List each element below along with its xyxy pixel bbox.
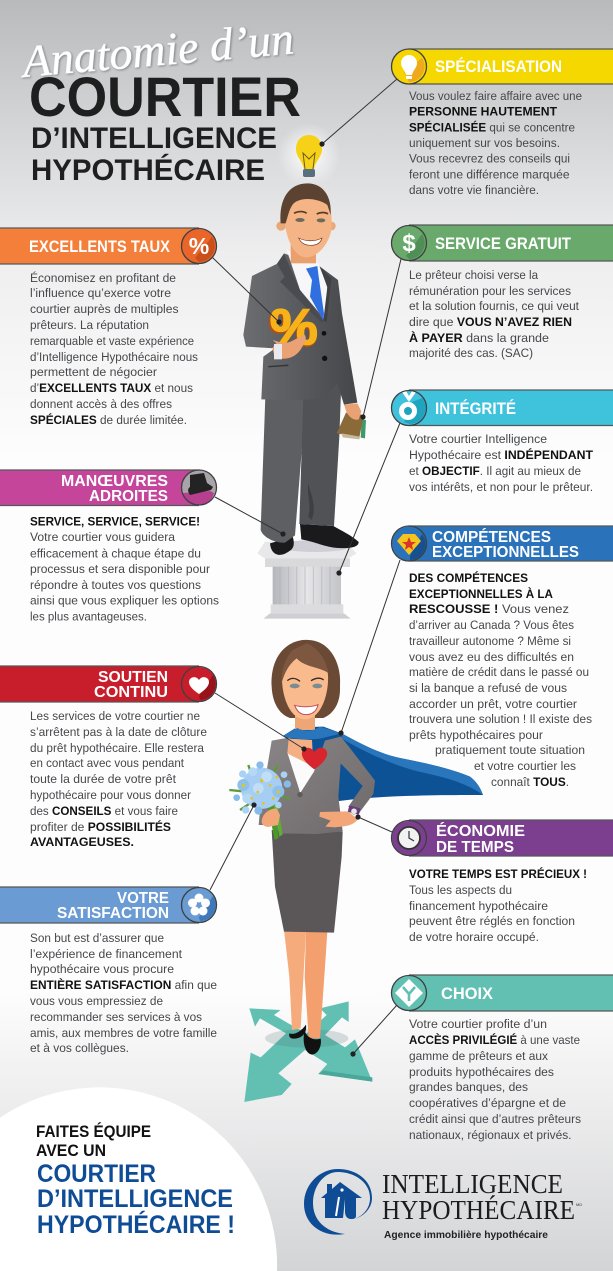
icon: bulb: [401, 55, 417, 79]
panel: économie de temps: VOTRE TEMPS EST PRÉCIEUX !: [409, 866, 587, 881]
panel: excellents taux: l’influence qu’exerce votre: [30, 286, 171, 300]
icon: flower: [188, 894, 210, 916]
panel: soutien continu: toute la durée de votre prêt: [30, 772, 177, 786]
title: COURTIER: [29, 65, 301, 128]
panel: compétences exceptionnelles: connaît TOUS.: [491, 775, 569, 789]
panel: service gratuit: rémunération pour les services: [409, 284, 571, 298]
panel: compétences exceptionnelles: DES COMPÉTENCES: [409, 570, 528, 585]
panel: service gratuit: et la solution fournis, ce qui veut: [409, 299, 580, 313]
skirt: [272, 830, 343, 933]
panel: votre satisfaction: Son but est d’assurer que: [30, 931, 164, 945]
head: [276, 183, 336, 263]
legs: [284, 930, 327, 1038]
panel: spécialisation: uniquement sur vos besoins.: [409, 136, 560, 150]
call to action circle: FAITES ÉQUIPE: [36, 1122, 151, 1141]
panel: compétences exceptionnelles: d’arriver au Canada ? Vous êtes: [409, 618, 574, 632]
panel: choix: crédit ainsi que d’autres prêteurs: [409, 1112, 581, 1126]
book and money: [337, 403, 366, 439]
panel: excellents taux: EXCELLENTS TAUX: [29, 238, 170, 256]
hand: [272, 335, 306, 359]
arrows on floor: [244, 1001, 372, 1102]
panel: votre satisfaction: amis, aux membres de votre famille: [30, 1026, 217, 1040]
logo: Intelligence Hypothécaire: [304, 1169, 582, 1241]
trousers: [261, 373, 342, 543]
panel: intégrité: Votre courtier Intelligence: [409, 432, 547, 446]
panel: spécialisation: dans votre vie financière.: [409, 183, 539, 197]
panel: soutien continu: Les services de votre courtier ne: [30, 709, 200, 723]
icon: light bulb on head: [277, 123, 341, 187]
panel: compétences exceptionnelles: RESCOUSSE ! Vous venez: [409, 602, 569, 616]
panel: choix: [392, 975, 613, 1142]
panel: soutien continu: en contact avec vous pendant: [30, 756, 185, 770]
panel: votre satisfaction: ENTIÈRE SATISFACTION afin que: [30, 977, 217, 992]
cape: [283, 727, 483, 802]
logo mark: MD: [576, 1202, 582, 1207]
panel: économie de temps: Tous les aspects du: [409, 883, 512, 897]
panel: compétences exceptionnelles: EXCEPTIONNELLES À LA: [409, 586, 553, 601]
icon: percent: %: [189, 233, 209, 259]
panel: spécialisation: [392, 49, 613, 197]
panel: votre satisfaction: SATISFACTION: [57, 905, 169, 922]
icon: dollar: $: [402, 230, 416, 257]
panel: spécialisation: SPÉCIALISATION: [435, 57, 562, 76]
panel: compétences exceptionnelles: vous avez eu des difficultés en: [409, 650, 574, 664]
panel: excellents taux: prêteurs. La réputation: [30, 318, 149, 332]
panel: intégrité: Hypothécaire est INDÉPENDANT: [409, 447, 593, 462]
illustration: businesswoman with cape: [229, 640, 483, 1102]
panel: compétences exceptionnelles: et votre courtier les: [474, 759, 576, 773]
panel: manœuvres adroites: SERVICE, SERVICE, SERVICE!: [30, 514, 200, 528]
panel: choix: Votre courtier profite d’un: [409, 1017, 547, 1031]
panel: spécialisation: PERSONNE HAUTEMENT: [409, 104, 557, 118]
panel: soutien continu: profiter de POSSIBILITÉS: [30, 819, 171, 834]
panel: économie de temps: peuvent être réglés en fonction: [409, 914, 575, 928]
panel: soutien continu: AVANTAGEUSES.: [30, 835, 134, 849]
panel: compétences exceptionnelles: trouvera une solution ! Il existe des: [409, 712, 592, 726]
icon: shoe: [188, 473, 213, 495]
panel: service gratuit: [392, 225, 613, 360]
panel: votre satisfaction: [0, 887, 217, 1055]
panel: compétences exceptionnelles: si la banque a refusé de vous: [409, 681, 567, 695]
panel: compétences exceptionnelles: [392, 526, 613, 789]
panel: service gratuit: dire que VOUS N’AVEZ RIEN: [409, 315, 572, 329]
logo mark: [304, 1169, 582, 1235]
heart: [302, 748, 327, 769]
panel: excellents taux: d’EXCELLENTS TAUX et nous: [30, 381, 193, 395]
panel: compétences exceptionnelles: pratiquement toute situation: [435, 743, 585, 757]
panel: compétences exceptionnelles: EXCEPTIONNELLES: [432, 544, 579, 561]
panel: économie de temps: [392, 820, 613, 944]
pedestal: [257, 540, 357, 619]
bouquet: [229, 761, 291, 840]
call to action circle: AVEC UN: [36, 1142, 106, 1160]
call to action circle: [0, 1087, 277, 1271]
shoes: [270, 524, 359, 555]
panel: manœuvres adroites: [0, 470, 219, 624]
panel: économie de temps: ÉCONOMIE: [436, 821, 525, 840]
panel: manœuvres adroites: ADROITES: [89, 488, 168, 505]
panel: spécialisation: feront une différence marquée: [409, 168, 570, 182]
panel: compétences exceptionnelles: COMPÉTENCES: [432, 527, 551, 546]
panel: excellents taux: Économisez en profitant de: [30, 270, 176, 285]
panel: spécialisation: Vous voulez faire affaire avec une: [409, 89, 582, 103]
panel: intégrité: INTÉGRITÉ: [435, 399, 516, 418]
logo mark: HYPOTHÉCAIRE: [382, 1195, 575, 1225]
panel: votre satisfaction: recommander ses services à vos: [30, 1010, 202, 1024]
call to action circle: COURTIER: [37, 1160, 156, 1188]
jacket: [259, 737, 375, 834]
icon: super shield: [397, 534, 421, 555]
panel: soutien continu: hypothécaire pour vous donner: [30, 788, 191, 802]
panel: soutien continu: CONTINU: [94, 684, 168, 701]
panel: économie de temps: DE TEMPS: [436, 839, 514, 856]
panel: spécialisation: Vous recevrez des conseils qui: [409, 152, 570, 166]
panel: compétences exceptionnelles: matière de crédit dans le passé ou: [409, 665, 589, 679]
panel: soutien continu: [0, 666, 216, 849]
panel: manœuvres adroites: Votre courtier vous guidera: [30, 530, 175, 544]
panel: excellents taux: [0, 228, 216, 427]
panel: compétences exceptionnelles: travailleur autonome ? Même si: [409, 634, 571, 648]
panel: compétences exceptionnelles: accorder un prêt, votre courtier: [409, 697, 577, 711]
panel: manœuvres adroites: efficacement à chaque étape du: [30, 546, 201, 560]
panel: spécialisation: SPÉCIALISÉE qui se concentre: [409, 120, 575, 134]
panel: votre satisfaction: vous vous empressiez de: [30, 994, 163, 1008]
panel: choix: coopératives d’épargne et de: [409, 1096, 566, 1110]
percent symbol in hand: %: [269, 300, 317, 356]
panel: votre satisfaction: et à vos collègues.: [30, 1041, 129, 1055]
panel: manœuvres adroites: ainsi que vous expliquer les options: [30, 594, 219, 608]
percent symbol in hand: %: [270, 299, 318, 355]
call to action circle: HYPOTHÉCAIRE !: [37, 1210, 235, 1239]
icon: heart: [189, 677, 209, 694]
panel: excellents taux: SPÉCIALES de durée limitée.: [30, 412, 187, 427]
panel: soutien continu: s’arrêtent pas à la date de clôture: [30, 725, 207, 739]
panel: choix: produits hypothécaires des: [409, 1065, 554, 1079]
panel: votre satisfaction: l’expérience de financement: [30, 947, 183, 961]
panel: votre satisfaction: hypothécaire vous procure: [30, 962, 174, 976]
panel: soutien continu: SOUTIEN: [98, 669, 168, 686]
panel: manœuvres adroites: répondre à toutes vos questions: [30, 578, 201, 592]
cape collar: [283, 727, 342, 739]
panel: intégrité: vos intérêts, et non pour le prêteur.: [409, 480, 593, 494]
panel: excellents taux: permettent de négocier: [30, 365, 157, 379]
title: Anatomie d’un: [17, 12, 296, 87]
logo: Intelligence Hypothécaire: Agence immobilière hypothécaire: [384, 1229, 548, 1241]
panel: service gratuit: À PAYER dans la grande: [409, 330, 549, 345]
title: D’INTELLIGENCE: [31, 122, 277, 155]
panel: soutien continu: du prêt hypothécaire. Elle restera: [30, 741, 204, 755]
panel: excellents taux: remarquable et vaste expérience: [30, 334, 194, 348]
panel: intégrité: [392, 390, 613, 494]
panel: excellents taux: d’Intelligence Hypothécaire nous: [30, 350, 198, 364]
head: [272, 640, 340, 730]
panel: choix: CHOIX: [441, 985, 493, 1003]
panel: service gratuit: SERVICE GRATUIT: [435, 235, 571, 253]
panel: service gratuit: majorité des cas. (SAC): [409, 346, 533, 360]
panel: votre satisfaction: VOTRE: [117, 890, 169, 907]
hand and watch: [319, 805, 361, 827]
logo mark: INTELLIGENCE: [382, 1169, 563, 1199]
connector lines: [210, 79, 401, 1057]
illustration: businessman on pedestal: [243, 183, 366, 619]
panel: manœuvres adroites: les plus avantageuses.: [30, 610, 147, 624]
panel: manœuvres adroites: MANŒUVRES: [61, 473, 168, 490]
icon: medal: [399, 391, 417, 420]
jacket: [243, 253, 357, 405]
title: [17, 12, 301, 187]
title: HYPOTHÉCAIRE: [31, 153, 265, 187]
panel: service gratuit: Le prêteur choisi verse la: [409, 268, 538, 282]
panel: choix: grandes banques, des: [409, 1080, 528, 1094]
panel: choix: nationaux, régionaux et privés.: [409, 1128, 572, 1142]
panel: excellents taux: donnent accès à des offres: [30, 397, 172, 411]
icon: clock: [398, 827, 420, 849]
icon: diverging arrows: [395, 979, 423, 1007]
panel: économie de temps: de votre horaire occupé.: [409, 930, 539, 944]
panel: excellents taux: courtier auprès de multiples: [30, 302, 178, 316]
panel: soutien continu: des CONSEILS et vous faire: [30, 804, 178, 818]
panel: manœuvres adroites: processus et sera disponible pour: [30, 562, 210, 576]
shoes: [289, 1025, 321, 1055]
panel: choix: ACCÈS PRIVILÉGIÉ à une vaste: [409, 1032, 580, 1047]
panel: compétences exceptionnelles: prêts hypothécaires pour: [409, 728, 543, 742]
panel: choix: gamme de prêteurs et aux: [409, 1049, 549, 1063]
panel: intégrité: et OBJECTIF. Il agit au mieux de: [409, 464, 581, 478]
call to action circle: D’INTELLIGENCE: [37, 1185, 233, 1213]
shirt and tie: [268, 250, 331, 367]
panel: économie de temps: financement hypothécaire: [409, 899, 548, 913]
